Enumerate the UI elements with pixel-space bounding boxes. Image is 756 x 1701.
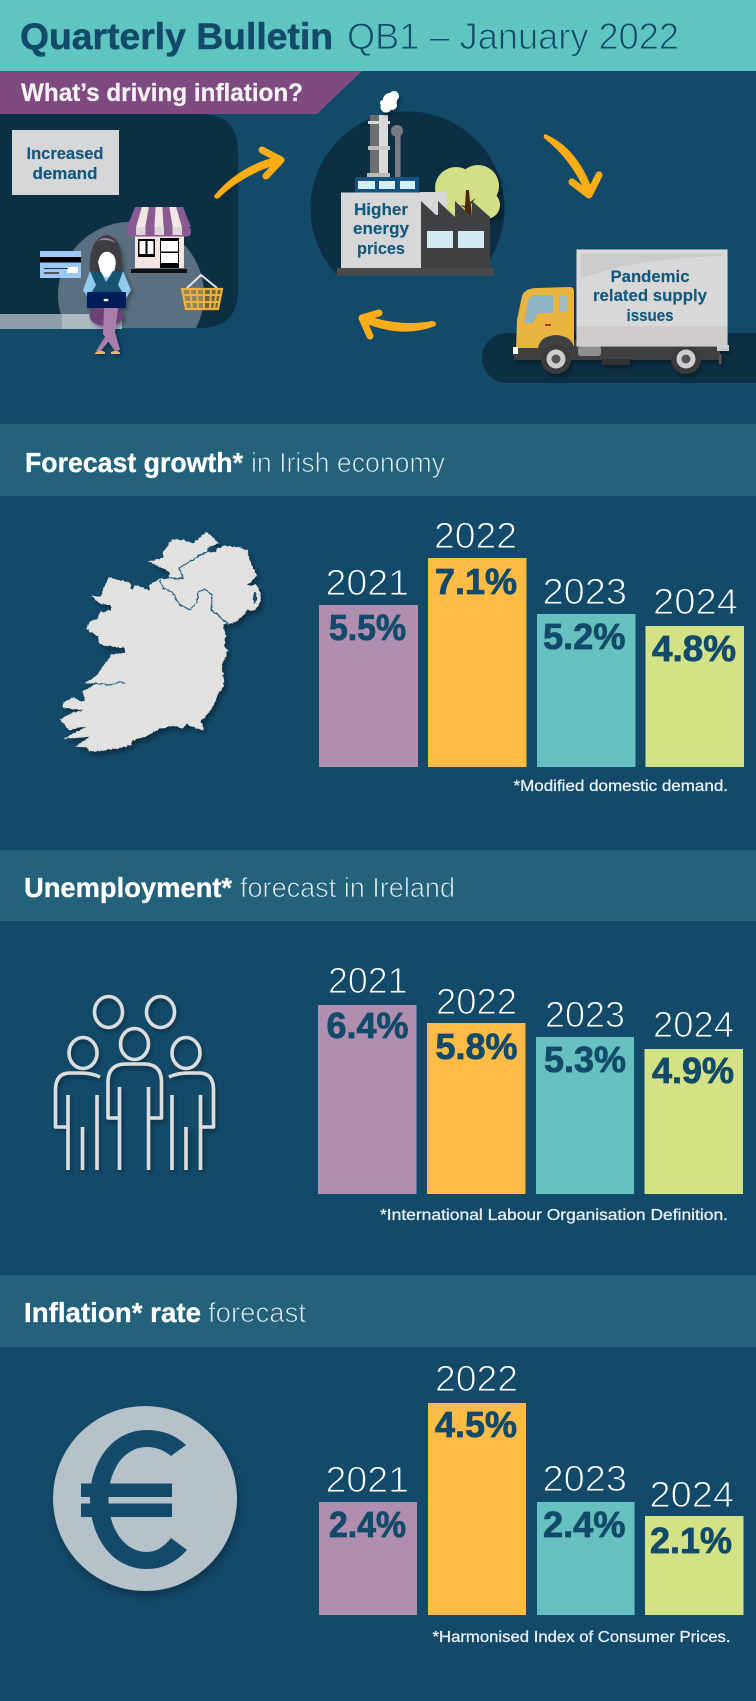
icon: spotlight circle and bench bbox=[0, 222, 204, 329]
bar chart: unemployment bbox=[318, 960, 743, 1194]
bar: 2022 inflation bbox=[428, 1358, 526, 1615]
icon: bank card bbox=[40, 251, 81, 278]
section header: forecast growth: Forecast growth* bbox=[25, 447, 243, 478]
label: pandemic related supply issues: Pandemic bbox=[610, 267, 690, 286]
icon: factory with chimney and tree bbox=[337, 91, 500, 276]
label: higher energy prices: prices bbox=[357, 239, 405, 258]
bar: 2023 growth bbox=[537, 571, 636, 767]
title: Quarterly Bulletin bbox=[20, 16, 333, 57]
footnote: harmonised index: *Harmonised Index of Consumer Prices. bbox=[432, 1629, 730, 1646]
arrow: demand to energy bbox=[214, 150, 281, 199]
bar: 2024 growth bbox=[646, 581, 744, 767]
footnote: international labour organisation: *International Labour Organisation Definition. bbox=[380, 1207, 728, 1224]
bar: 2022 inflation: 4.5% bbox=[435, 1404, 517, 1445]
section header: forecast growth bbox=[0, 424, 756, 496]
section header: inflation: forecast bbox=[208, 1297, 306, 1328]
label: increased demand: Increased bbox=[26, 144, 104, 163]
section header: unemployment: forecast in Ireland bbox=[240, 872, 455, 903]
label: higher energy prices: energy bbox=[353, 219, 410, 238]
section header: inflation bbox=[0, 1275, 756, 1347]
ribbon: what's driving inflation bbox=[0, 71, 362, 114]
bar: 2021 unemployment bbox=[318, 960, 416, 1194]
bar: 2024 inflation bbox=[645, 1474, 744, 1615]
icon: group of people bbox=[56, 996, 214, 1170]
label: increased demand bbox=[12, 130, 119, 195]
panel: increased demand background bbox=[0, 114, 238, 328]
icon: factory backdrop circle bbox=[310, 111, 504, 275]
bar: 2023 unemployment: 2023 bbox=[545, 994, 625, 1035]
bar: 2021 inflation: 2021 bbox=[326, 1459, 409, 1500]
bar: 2022 growth: 2022 bbox=[434, 515, 517, 556]
label: increased demand: demand bbox=[32, 164, 98, 183]
bar: 2024 growth: 2024 bbox=[653, 581, 738, 622]
bar: 2023 unemployment: 5.3% bbox=[544, 1039, 626, 1080]
label: higher energy prices bbox=[341, 192, 421, 268]
section header: unemployment: Unemployment* bbox=[24, 872, 232, 903]
bar: 2023 inflation: 2023 bbox=[542, 1458, 627, 1499]
subtitle: issue and date: QB1 – January 2022 bbox=[347, 16, 679, 57]
bar: 2021 unemployment: 6.4% bbox=[326, 1005, 408, 1046]
header band bbox=[0, 0, 756, 71]
bar: 2023 inflation: 2.4% bbox=[543, 1504, 626, 1545]
bar: 2023 growth: 5.2% bbox=[543, 616, 626, 657]
label: pandemic related supply issues bbox=[577, 250, 727, 346]
bar: 2021 unemployment: 2021 bbox=[328, 960, 408, 1001]
section header: inflation: Inflation* rate bbox=[24, 1297, 201, 1328]
bar: 2024 unemployment: 4.9% bbox=[652, 1050, 734, 1091]
label: pandemic related supply issues: related supply bbox=[593, 286, 708, 305]
bar: 2022 unemployment: 2022 bbox=[436, 981, 517, 1022]
footnote: modified domestic demand: *Modified domestic demand. bbox=[514, 778, 728, 795]
label: higher energy prices: Higher bbox=[354, 200, 408, 219]
bar: 2022 inflation: 2022 bbox=[435, 1358, 518, 1399]
bar: 2021 growth: 2021 bbox=[326, 562, 409, 603]
bar: 2022 growth bbox=[428, 515, 526, 767]
road pill under truck bbox=[482, 333, 756, 383]
bar: 2023 unemployment bbox=[536, 994, 634, 1194]
bar: 2022 unemployment bbox=[427, 981, 526, 1194]
bar: 2023 growth: 2023 bbox=[542, 571, 627, 612]
icon: euro coin bbox=[53, 1406, 237, 1591]
bar: 2022 unemployment: 5.8% bbox=[436, 1026, 518, 1067]
icon: woman with laptop bbox=[83, 235, 131, 354]
bar chart: inflation bbox=[319, 1358, 744, 1615]
bar: 2024 inflation: 2.1% bbox=[650, 1520, 732, 1561]
bar: 2023 inflation bbox=[537, 1458, 634, 1615]
bar: 2021 inflation: 2.4% bbox=[329, 1504, 406, 1545]
icon: truck bbox=[513, 287, 729, 374]
bar chart: forecast growth bbox=[319, 515, 744, 767]
bar: 2024 inflation: 2024 bbox=[650, 1474, 734, 1515]
bar: 2022 growth: 7.1% bbox=[435, 561, 517, 602]
bar: 2021 growth bbox=[319, 562, 418, 767]
bar: 2024 unemployment: 2024 bbox=[653, 1004, 734, 1045]
icon: shop bbox=[127, 207, 191, 273]
bar: 2024 unemployment bbox=[644, 1004, 743, 1194]
section header: unemployment bbox=[0, 850, 756, 921]
icon: shopping basket bbox=[182, 275, 222, 309]
map of Ireland bbox=[60, 532, 261, 752]
bar: 2024 growth: 4.8% bbox=[652, 628, 736, 669]
label: pandemic related supply issues: issues bbox=[626, 306, 674, 325]
bar: 2021 inflation bbox=[319, 1459, 417, 1615]
ribbon: what's driving inflation: What’s driving inflation? bbox=[21, 79, 303, 107]
bar: 2021 growth: 5.5% bbox=[329, 607, 406, 648]
arrow: energy to supply bbox=[544, 134, 599, 195]
section header: forecast growth: in Irish economy bbox=[251, 447, 445, 478]
arrow: supply to demand bbox=[362, 313, 436, 336]
